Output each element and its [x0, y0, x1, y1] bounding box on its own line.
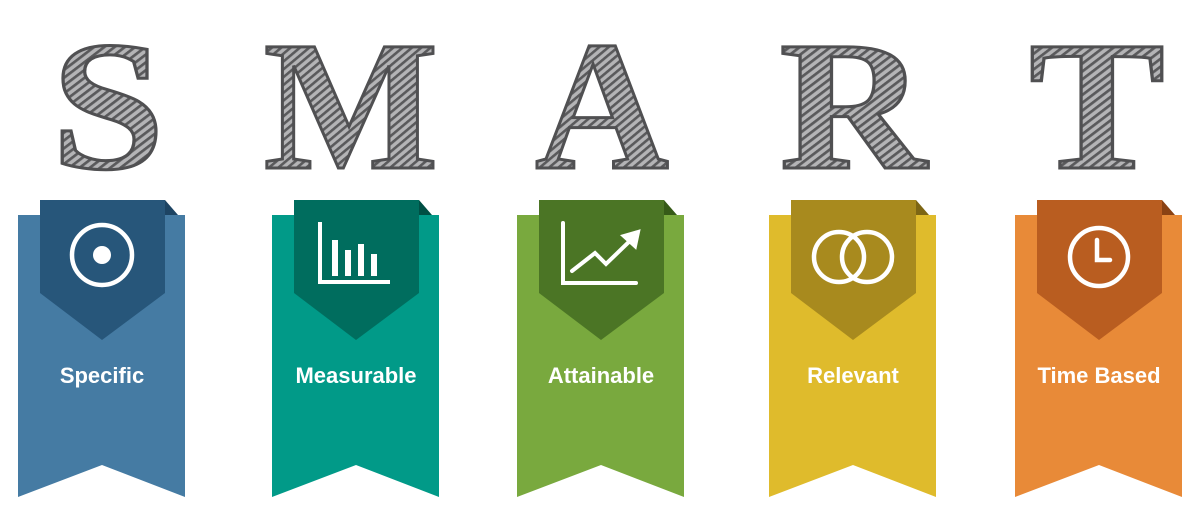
letter S: S: [51, 4, 165, 209]
icon: target: [72, 225, 132, 285]
letter R: R: [780, 4, 929, 209]
label: Measurable: [295, 363, 417, 388]
banner: Specific: [18, 200, 185, 497]
icon: bar chart: [318, 222, 390, 284]
letter M: M: [264, 4, 438, 209]
letter A: A: [535, 4, 669, 209]
label: Specific: [60, 363, 144, 388]
icon: growth chart: [563, 223, 638, 283]
icon: clock: [1070, 228, 1128, 286]
banner: Measurable: [272, 200, 439, 497]
banner: Time Based: [1015, 200, 1182, 497]
label: Relevant: [807, 363, 900, 388]
title letters: SMART: [51, 4, 1165, 209]
label: Time Based: [1037, 363, 1161, 388]
letter T: T: [1029, 4, 1165, 209]
banner: Attainable: [517, 200, 684, 497]
label: Attainable: [548, 363, 654, 388]
icon: overlapping circles: [814, 232, 892, 282]
banner: Relevant: [769, 200, 936, 497]
